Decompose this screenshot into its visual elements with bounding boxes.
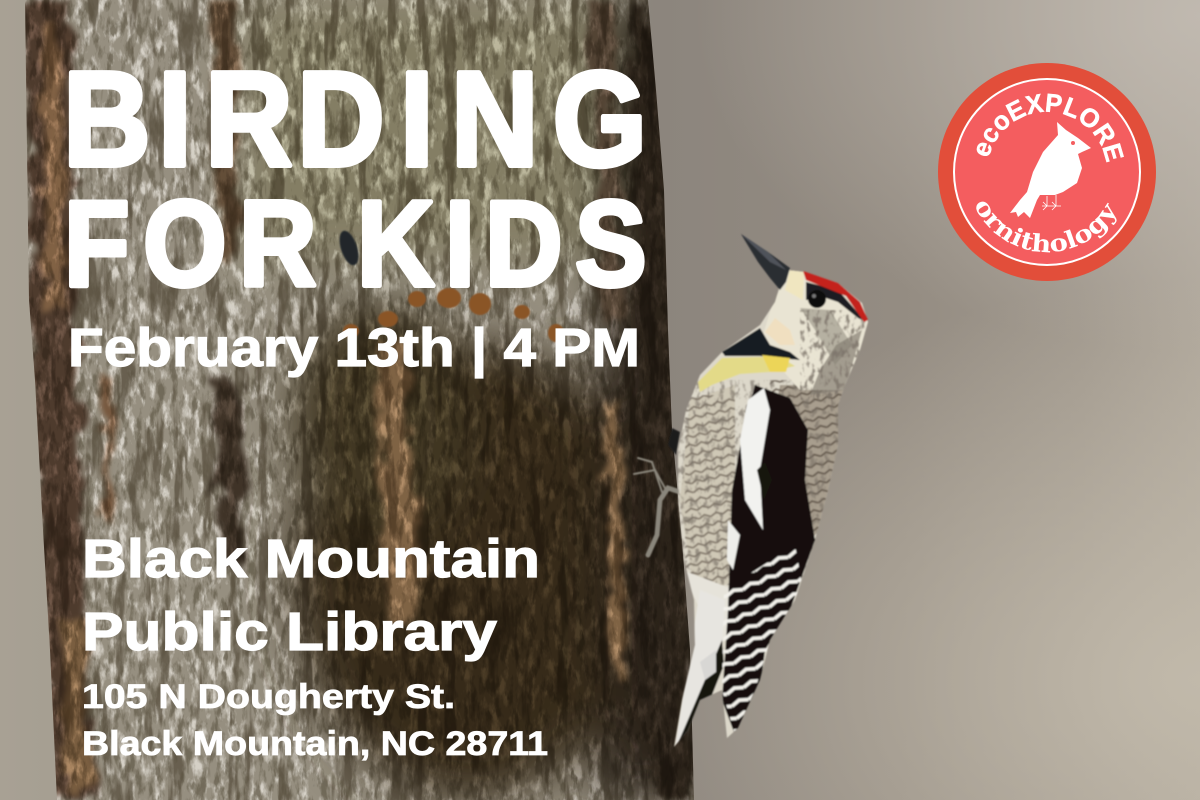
black wing — [722, 385, 815, 735]
white wing patch — [740, 388, 770, 530]
venue line 2: Public Library — [82, 602, 497, 662]
black bib — [722, 328, 800, 360]
title — [63, 45, 647, 312]
title line: FOR KIDS: FOR KIDS — [64, 176, 647, 312]
eye — [808, 290, 826, 308]
logo bottom text: ornithology — [976, 202, 1117, 252]
tree trunk photo — [0, 0, 720, 800]
red crown — [803, 271, 868, 322]
venue line 1: Black Mountain — [82, 529, 540, 589]
face stripe — [806, 282, 866, 322]
beetle — [338, 230, 360, 266]
logo top text: ecoEXPLORE — [976, 94, 1124, 162]
venue — [82, 529, 540, 662]
bird: yellow-bellied sapsucker — [634, 234, 880, 750]
address — [82, 678, 548, 763]
feet — [634, 458, 680, 555]
title line: BIRDING: BIRDING — [63, 45, 647, 195]
street: 105 N Dougherty St. — [82, 678, 455, 716]
logo: ecoEXPLORE ornithology badge — [938, 63, 1156, 281]
date and time: February 13th | 4 PM — [68, 318, 640, 379]
throat cream — [785, 270, 804, 300]
city: Black Mountain, NC 28711 — [82, 725, 548, 763]
back stripe — [676, 606, 723, 744]
yellow chest — [698, 357, 795, 392]
head pale — [760, 270, 868, 390]
beak — [741, 234, 790, 290]
icon: cardinal — [1010, 122, 1091, 218]
sapwell holes — [343, 288, 564, 342]
body — [673, 269, 869, 748]
